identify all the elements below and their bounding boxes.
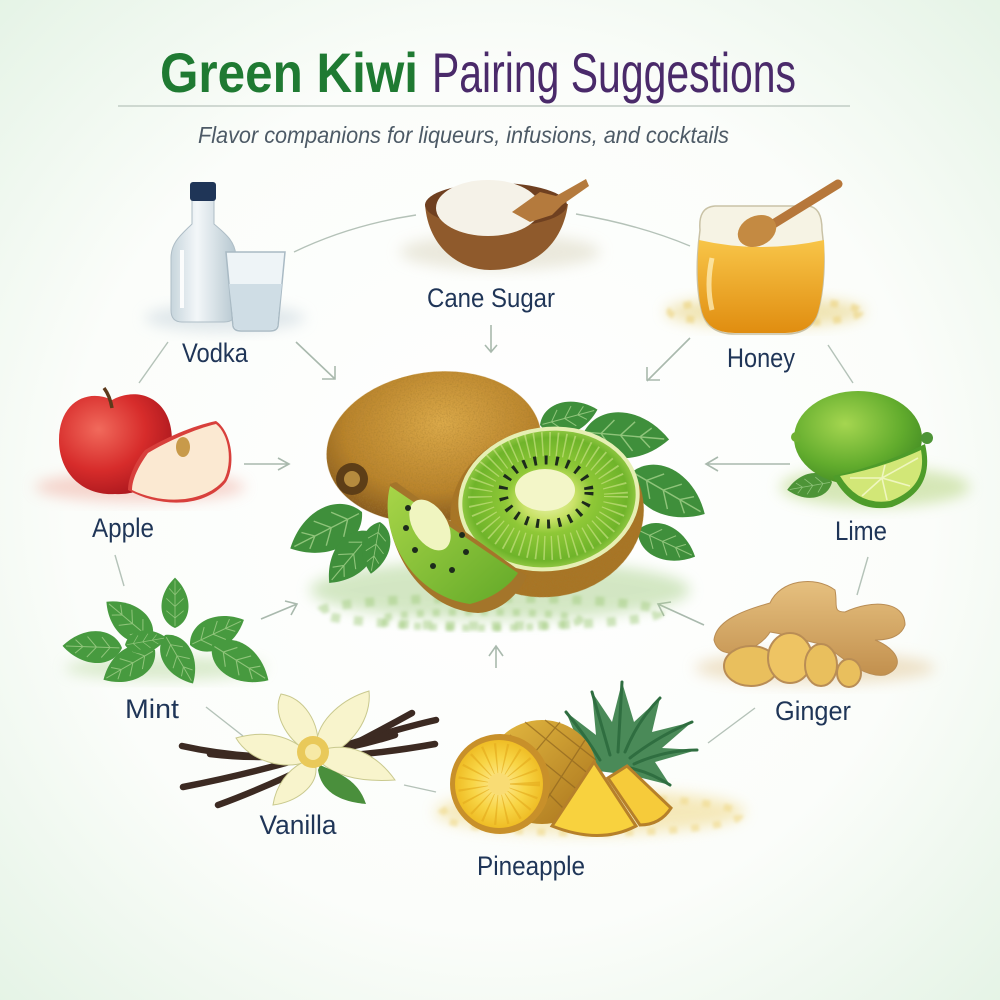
label: Honey: Honey <box>727 343 795 373</box>
subtitle: Flavor companions for liqueurs, infusions, and cocktails <box>198 122 729 148</box>
ingredient: apple <box>35 388 245 503</box>
title: Pairing Suggestions <box>432 41 796 104</box>
ingredient: honey <box>665 184 865 334</box>
shot glass <box>226 252 285 331</box>
ingredient: vodka <box>145 182 305 332</box>
label: Mint: Mint <box>125 694 180 724</box>
title: Green Kiwi <box>160 41 418 104</box>
kiwi wedge <box>388 482 527 613</box>
ingredient: lime <box>780 391 970 508</box>
label: Ginger: Ginger <box>775 696 851 726</box>
central kiwi illustration <box>280 358 716 628</box>
ingredient: pineapple <box>435 682 745 836</box>
whole kiwi <box>317 358 551 536</box>
green splash specks <box>320 598 660 626</box>
ingredient: ginger <box>695 581 935 687</box>
connector lines between ingredients <box>115 214 868 792</box>
label: Apple: Apple <box>92 513 154 543</box>
arrows pointing to the kiwi <box>244 325 790 668</box>
ingredient: cane sugar <box>400 179 600 270</box>
label: Vodka: Vodka <box>182 338 249 368</box>
title <box>160 41 796 104</box>
kiwi leaves <box>280 394 716 594</box>
label: Cane Sugar: Cane Sugar <box>427 283 555 313</box>
large kiwi half <box>439 416 655 610</box>
label: Pineapple: Pineapple <box>477 851 585 881</box>
ingredient: vanilla <box>182 691 436 805</box>
label: Lime: Lime <box>835 516 887 546</box>
ingredient: mint <box>62 578 278 695</box>
label: Vanilla: Vanilla <box>260 810 337 840</box>
bottle <box>171 200 236 322</box>
